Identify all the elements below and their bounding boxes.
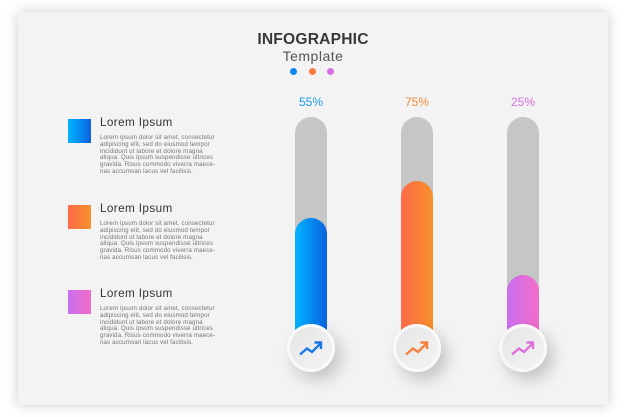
orange text: Lorem ipsum dolor sit amet, consectetur	[100, 220, 215, 227]
orange heading: Lorem Ipsum	[100, 202, 173, 215]
orange text: adipiscing elit, sed do eiusmod tempor	[100, 227, 210, 234]
blue text: incididunt ut labore et dolore magna	[100, 148, 203, 154]
purple text: nas accumsan lacus vel facilisis.	[100, 339, 193, 346]
blue fill	[295, 218, 327, 342]
orange text: gravida. Risus commodo viverra maece-	[100, 247, 215, 254]
bar: purple 25%	[507, 117, 539, 342]
subtitle: Template	[283, 48, 343, 64]
bar: orange 75%	[401, 117, 433, 342]
purple text: aliqua. Quis ipsum suspendisse ultrices	[100, 325, 213, 332]
orange text: aliqua. Quis ipsum suspendisse ultrices	[100, 240, 213, 247]
orange fill	[401, 181, 433, 342]
blue text: adipiscing elit, sed do eiusmod tempor	[100, 141, 210, 148]
blue text	[100, 134, 215, 175]
blue heading: Lorem Ipsum	[100, 116, 173, 129]
purple text: Lorem ipsum dolor sit amet, consectetur	[100, 305, 215, 312]
orange text	[100, 220, 215, 261]
blue text: aliqua. Quis ipsum suspendisse ultrices	[100, 154, 213, 161]
legend item: orange	[68, 202, 215, 261]
orange text: incididunt ut labore et dolore magna	[100, 234, 203, 240]
percentage: 25%: 25%	[511, 95, 535, 109]
blue text: gravida. Risus commodo viverra maece-	[100, 161, 215, 168]
purple text: incididunt ut labore et dolore magna	[100, 318, 203, 326]
icon: purple trend arrow	[499, 324, 547, 372]
orange text: nas accumsan lacus vel facilisis.	[100, 254, 193, 261]
icon: orange trend arrow	[393, 324, 441, 372]
purple fill	[507, 275, 539, 342]
purple text	[100, 305, 215, 346]
purple text: gravida. Risus commodo viverra maece-	[100, 332, 215, 339]
percentage: 75%: 75%	[405, 95, 429, 109]
orange swatch	[68, 205, 91, 229]
bar: blue 55%	[295, 117, 327, 342]
purple text: adipiscing elit, sed do eiusmod tempor	[100, 312, 210, 319]
title: INFOGRAPHIC	[257, 31, 369, 48]
icon: blue trend arrow	[287, 324, 335, 372]
purple heading: Lorem Ipsum	[100, 287, 173, 300]
legend item: purple	[68, 287, 215, 346]
purple swatch	[68, 290, 91, 314]
blue text: Lorem ipsum dolor sit amet, consectetur	[100, 134, 215, 141]
legend dots	[290, 68, 334, 75]
legend item: blue	[68, 116, 215, 175]
blue swatch	[68, 119, 91, 143]
blue text: nas accumsan lacus vel facilisis.	[100, 168, 193, 175]
percentage: 55%: 55%	[299, 95, 323, 109]
